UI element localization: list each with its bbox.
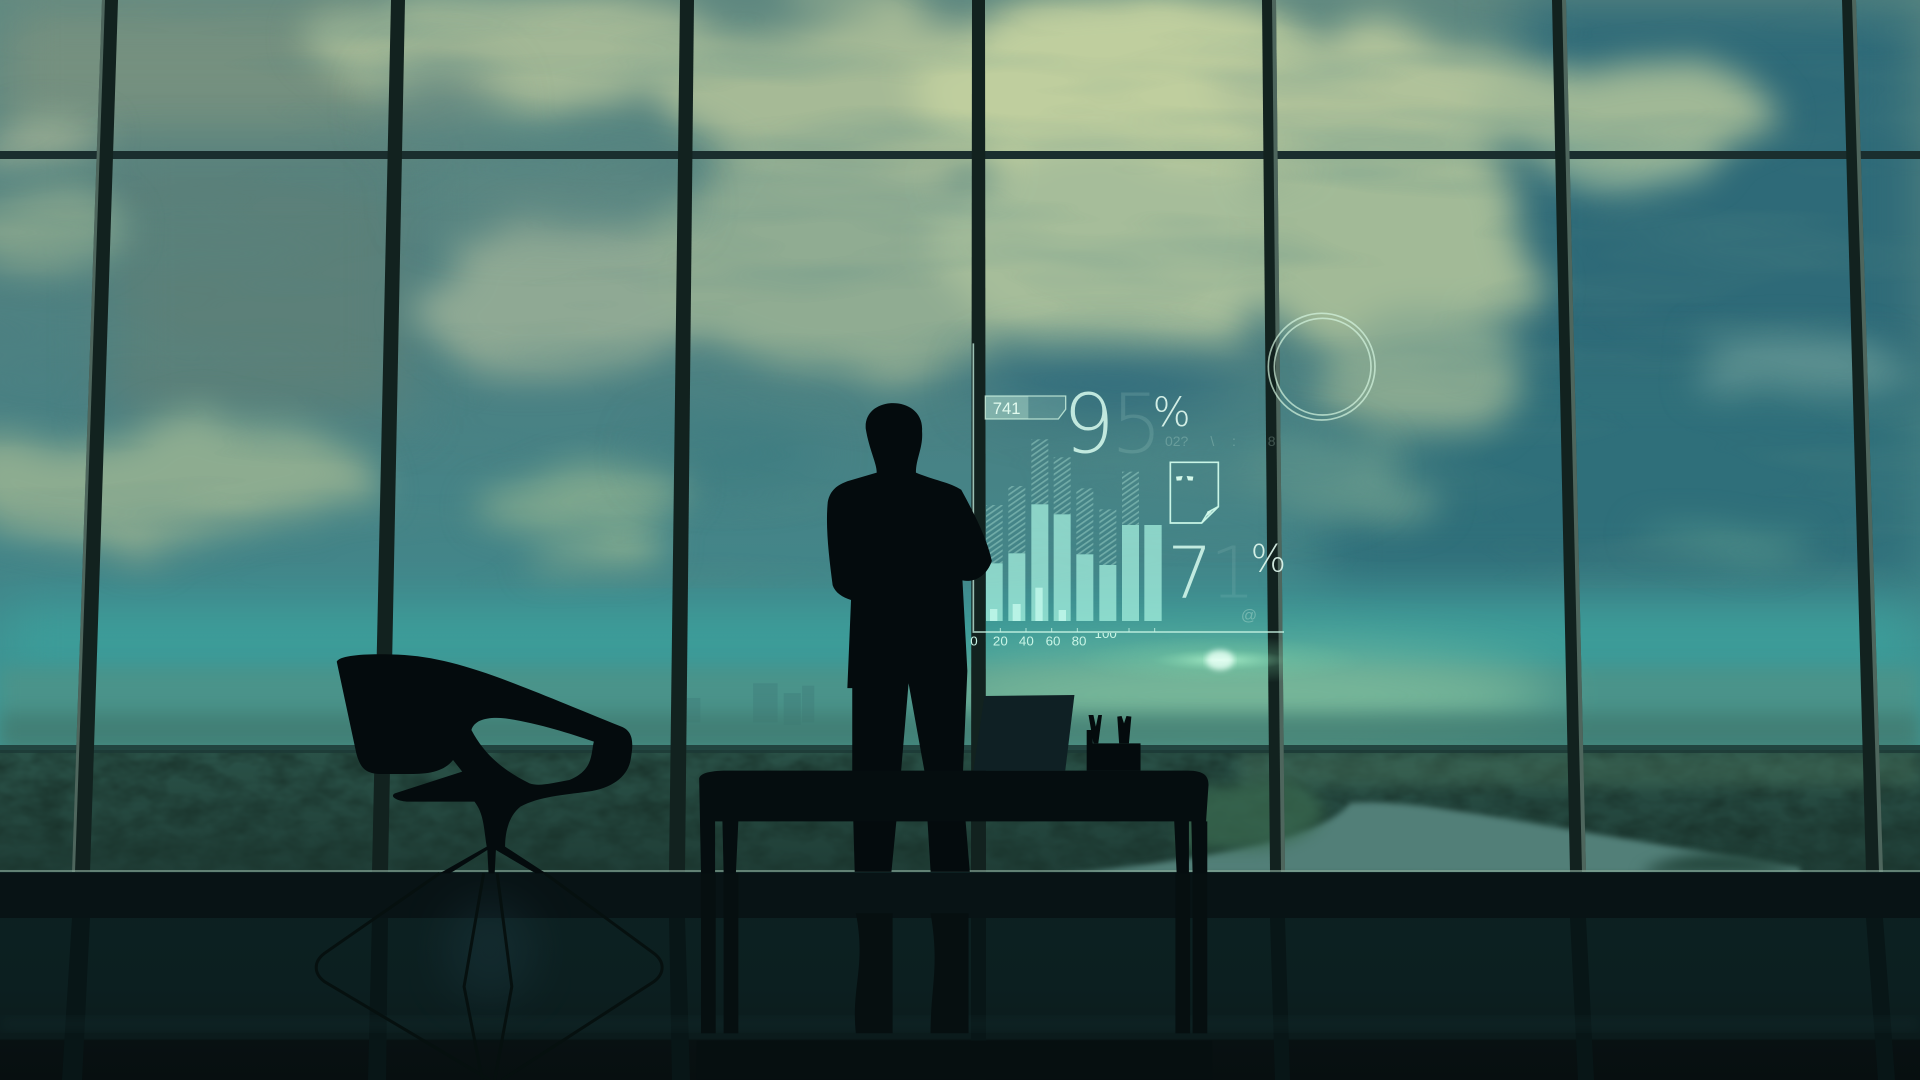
faint readout characters: \ <box>1210 433 1214 449</box>
floor with reflection <box>0 872 1920 1080</box>
silhouette: chair <box>337 654 632 873</box>
faint readout characters: 8 <box>1268 433 1276 449</box>
hatched bar targets <box>986 439 1139 565</box>
axis labels: 20 <box>993 634 1008 649</box>
axis labels: 40 <box>1019 634 1034 649</box>
faint readout characters <box>1165 433 1276 449</box>
inner bars <box>990 588 1066 621</box>
axis labels: 60 <box>1046 634 1060 649</box>
axis labels: 0 <box>970 634 978 649</box>
silhouette: desk <box>699 771 1209 873</box>
axis ticks <box>1000 628 1155 632</box>
faint readout characters: 02? <box>1165 433 1189 449</box>
readout 71%: 1 <box>1210 530 1255 614</box>
forest and river landscape <box>0 750 1920 874</box>
readout 71%: % <box>1251 537 1286 581</box>
chair reflection <box>316 873 662 1080</box>
axis labels <box>970 633 1116 646</box>
faint readout characters: : <box>1232 433 1236 449</box>
readout 71%: 7 <box>1167 530 1213 614</box>
badge 741: 741 <box>993 399 1021 418</box>
holographic chart panel <box>970 313 1375 649</box>
readout 71% <box>1167 530 1286 614</box>
panel frame line <box>973 343 1284 632</box>
readout 95%: 9 <box>1063 377 1115 472</box>
readout 95%: % <box>1153 390 1191 436</box>
badge 741 <box>985 396 1066 419</box>
axis labels: 80 <box>1072 634 1086 649</box>
horizon haze and distant city <box>0 649 1920 749</box>
readout 95% <box>1063 377 1191 472</box>
readout 95%: 5 <box>1111 377 1163 472</box>
icon: document note <box>1170 462 1218 523</box>
axis labels: 100 <box>1095 626 1117 641</box>
pen holder with pens <box>1087 715 1141 771</box>
ring gauge <box>1268 313 1375 420</box>
bar chart <box>986 504 1162 621</box>
desk and person reflection <box>697 873 1212 1080</box>
faint at sign: @ <box>1241 608 1257 625</box>
laptop <box>973 695 1074 771</box>
clouds <box>0 0 1920 588</box>
silhouette: man <box>827 403 992 872</box>
lens glow <box>1070 636 1370 684</box>
